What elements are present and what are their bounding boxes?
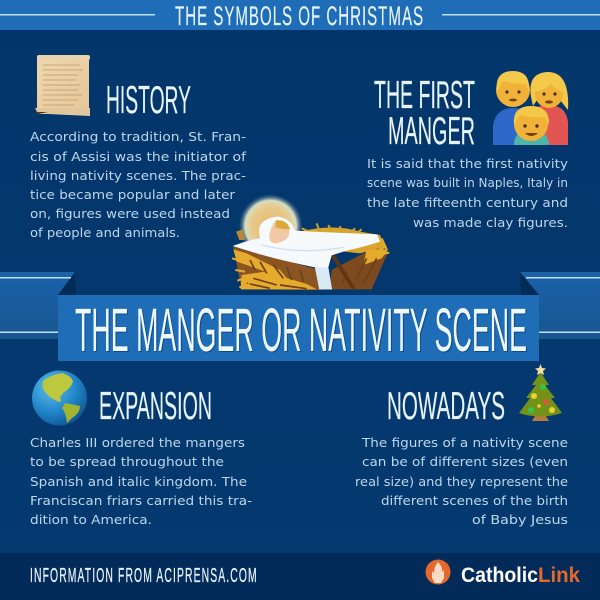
- logo: CatholicLink: [426, 560, 580, 587]
- text block: [30, 129, 247, 240]
- panel: nowadays: [355, 364, 568, 527]
- logo: CatholicLink: Link: [538, 564, 580, 587]
- footer: [0, 553, 600, 600]
- text block: living nativity scenes. The prac-: [30, 168, 246, 183]
- illustration: baby in manger: [232, 194, 389, 290]
- icon: christmas tree: [519, 364, 562, 421]
- text block: of people and animals.: [30, 225, 180, 240]
- icon: scroll: [35, 55, 90, 116]
- halo: [239, 194, 303, 258]
- text block: real size) and they represent the: [355, 474, 568, 489]
- text block: Spanish and italic kingdom. The: [30, 474, 247, 489]
- text block: the late fifteenth century and: [367, 195, 568, 210]
- text block: cis of Assisi was the initiator of: [30, 149, 247, 164]
- manger body: [233, 247, 321, 290]
- text block: scene was built in Naples, Italy in: [367, 175, 568, 190]
- heading: THE FIRST: [374, 74, 475, 117]
- text block: [30, 435, 252, 527]
- text block: different scenes of the birth: [381, 493, 568, 508]
- title: THE SYMBOLS OF CHRISTMAS: [175, 0, 423, 31]
- banner: [58, 295, 539, 364]
- logo: CatholicLink: Catholic: [461, 564, 538, 587]
- wooden stake: [333, 255, 354, 289]
- text block: dition to America.: [30, 512, 152, 527]
- text block: It is said that the first nativity: [367, 156, 569, 171]
- text block: can be of different sizes (even: [362, 454, 568, 469]
- text block: was made clay figures.: [413, 215, 568, 230]
- blanket: [233, 217, 380, 289]
- text block: According to tradition, St. Fran-: [30, 129, 246, 144]
- heading: EXPANSION: [99, 385, 212, 428]
- text block: [355, 435, 568, 527]
- text block: [367, 156, 569, 230]
- heading: [374, 74, 475, 153]
- banner ribbon: [0, 272, 600, 339]
- text block: of Baby Jesus: [472, 512, 568, 527]
- back straw: [300, 227, 385, 253]
- panel: the first manger: [367, 71, 569, 230]
- header band: [0, 0, 600, 31]
- straw: [233, 249, 288, 280]
- text block: Franciscan friars carried this tra-: [30, 493, 252, 508]
- baby face: [269, 220, 289, 243]
- source credit: INFORMATION FROM ACIPRENSA.COM: [30, 566, 257, 587]
- text block: Charles III ordered the mangers: [30, 435, 245, 450]
- text block: The figures of a nativity scene: [361, 435, 568, 450]
- panel: history: [30, 55, 247, 240]
- text block: to be spread throughout the: [30, 454, 224, 469]
- heading: MANGER: [388, 110, 475, 153]
- text block: on, figures were used instead: [30, 206, 230, 221]
- icon: globe: [32, 370, 87, 426]
- icon: family: [493, 71, 568, 145]
- panel: history: HISTORY: [106, 79, 191, 122]
- panel: expansion: [30, 370, 252, 527]
- text block: tice became popular and later: [30, 187, 236, 202]
